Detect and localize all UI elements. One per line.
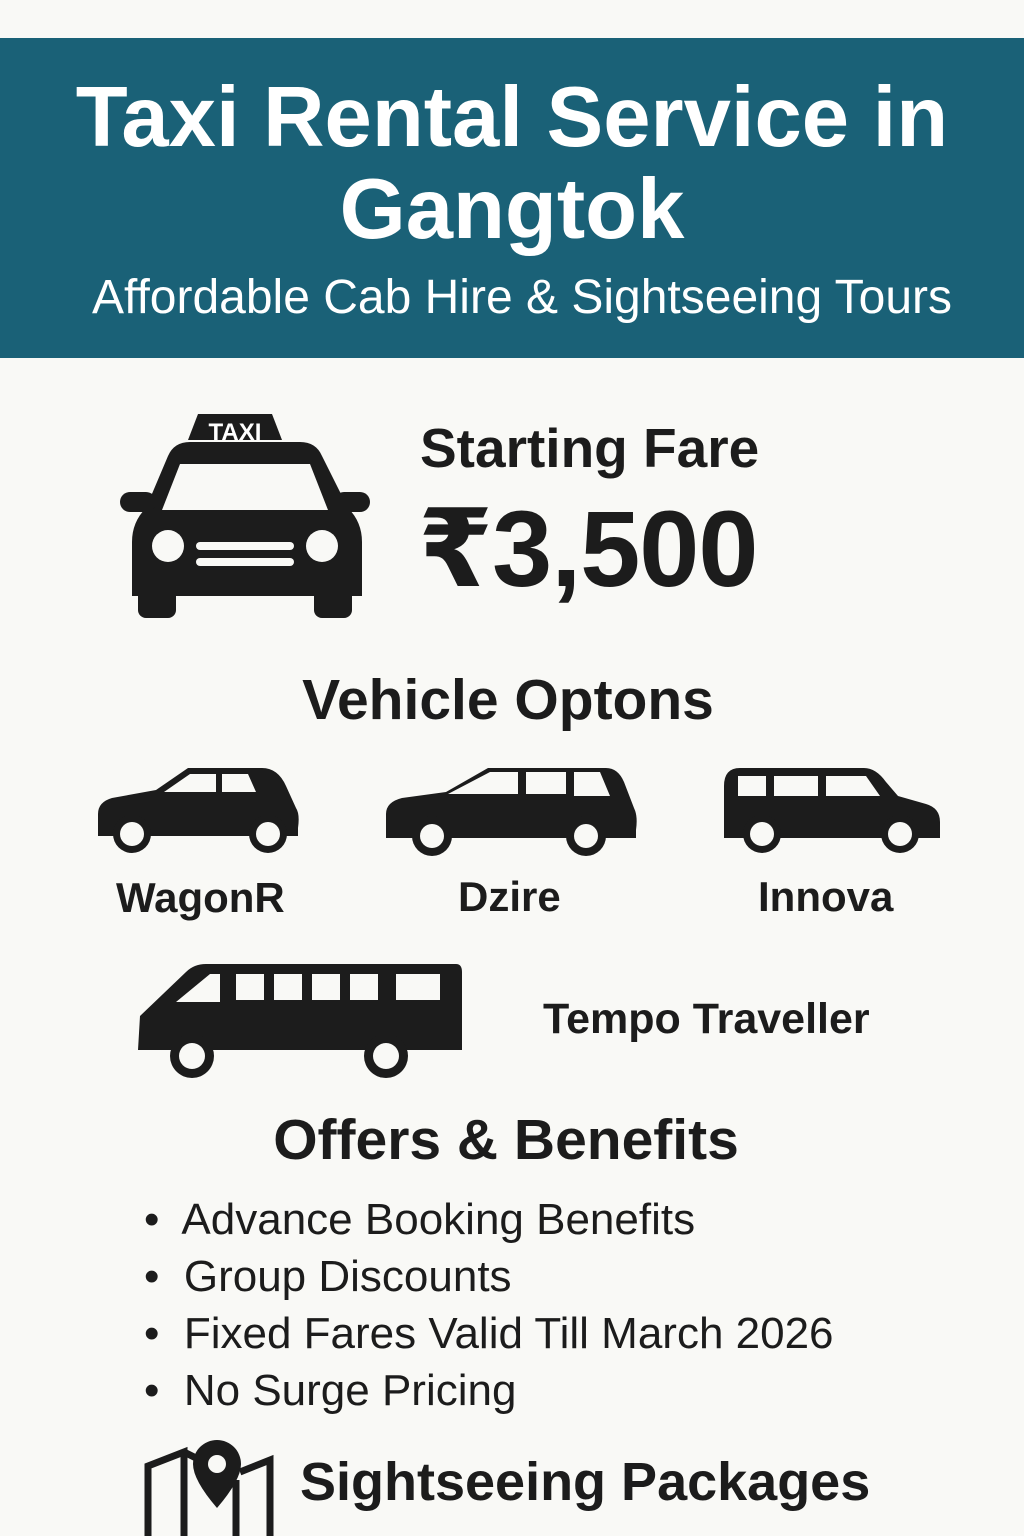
vehicle: tempo traveller xyxy=(138,964,462,1078)
header band xyxy=(0,38,1024,358)
label dzire: Dzire xyxy=(458,873,561,920)
vehicle: dzire xyxy=(386,768,637,920)
offers list: • Advance Booking Benefits xyxy=(144,1195,695,1244)
heading: vehicle options: Vehicle Optons xyxy=(302,668,714,732)
icon: taxi: TAXI xyxy=(209,419,261,446)
label innova: Innova xyxy=(758,873,893,920)
vehicle: wagonr xyxy=(98,768,299,921)
title: Gangtok xyxy=(340,162,684,257)
fare price: ₹3,500 xyxy=(418,488,757,609)
heading: offers: Offers & Benefits xyxy=(273,1108,739,1172)
offers list xyxy=(144,1195,834,1415)
offers list: • Fixed Fares Valid Till March 2026 xyxy=(144,1309,834,1358)
subtitle: Affordable Cab Hire & Sightseeing Tours xyxy=(92,271,952,324)
title: Taxi Rental Service in xyxy=(76,70,948,165)
starting fare label: Starting Fare xyxy=(420,417,759,479)
offers list: • No Surge Pricing xyxy=(144,1366,516,1415)
icon: map pin xyxy=(144,1440,274,1536)
vehicle: innova xyxy=(724,768,940,920)
label tempo traveller: Tempo Traveller xyxy=(543,995,870,1043)
label wagonr: WagonR xyxy=(116,874,285,921)
offers list: • Group Discounts xyxy=(144,1252,512,1301)
icon: taxi xyxy=(120,414,370,618)
heading: sightseeing packages: Sightseeing Packages xyxy=(300,1452,870,1512)
title xyxy=(76,70,948,257)
